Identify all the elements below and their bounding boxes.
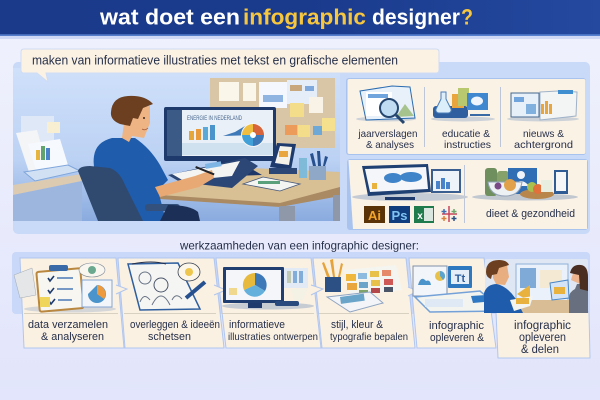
label: jaarverslagen: jaarverslagen xyxy=(358,128,418,140)
panel: use cases row one xyxy=(346,78,586,155)
step 5: infographic opleveren xyxy=(408,258,503,348)
step 2: overleggen xyxy=(116,258,224,348)
step 4: stijl en kleur xyxy=(311,258,415,348)
step 6: infographic opleveren en delen: infographic xyxy=(514,320,571,332)
illustration: designer at desk xyxy=(13,68,340,221)
heading: werkzaamheden: werkzaamheden van een infographic designer: xyxy=(179,238,419,252)
drawing tablet xyxy=(168,158,258,188)
icon: report with magnifier xyxy=(356,86,416,123)
icon: flask, books and screen xyxy=(431,88,495,122)
step 4: stijl en kleur: stijl, kleur & xyxy=(331,319,384,331)
step 3: illustraties ontwerpen: informatieve xyxy=(229,319,285,331)
title banner: wat doet een xyxy=(99,4,240,30)
panel: use cases row two xyxy=(347,159,588,230)
tablet, pens and print on desk xyxy=(243,143,328,191)
step 5: infographic opleveren: infographic xyxy=(429,320,484,332)
step 6: infographic opleveren en delen xyxy=(484,259,590,358)
upper blue backing panel xyxy=(13,62,590,234)
title banner: designer xyxy=(372,4,460,30)
icon: Photoshop xyxy=(389,206,410,223)
title banner xyxy=(0,0,600,39)
label: instructies: instructies xyxy=(444,139,491,151)
step 2: overleggen: overleggen & ideeën xyxy=(130,319,220,331)
label: educatie: educatie & xyxy=(442,128,490,140)
label: and analyses: & analyses xyxy=(366,139,414,151)
title banner: ? xyxy=(461,4,473,30)
label: dieet en gezondheid: dieet & gezondheid xyxy=(486,208,575,220)
step 3: illustraties ontwerpen: illustraties ontwerpen xyxy=(228,331,318,343)
step 6: infographic opleveren en delen: opleveren xyxy=(519,332,566,344)
monitor with chart xyxy=(164,107,276,177)
speech bubble: main description: maken van informatieve illustraties met tekst en grafische elementen xyxy=(32,54,398,68)
icon: Photoshop: Ps xyxy=(392,208,407,223)
step 1: data verzamelen: data verzamelen xyxy=(28,319,108,331)
icon: Excel: x xyxy=(417,211,423,222)
step 1: data verzamelen xyxy=(14,258,124,348)
step 2: overleggen: schetsen xyxy=(148,331,191,343)
icon: news on laptop and magazine xyxy=(507,90,579,122)
speech bubble: main description xyxy=(21,49,439,82)
office chair xyxy=(78,166,200,221)
label: achtergrond: achtergrond xyxy=(514,139,573,151)
designer figure xyxy=(94,96,215,221)
step 4: stijl en kleur: typografie bepalen xyxy=(330,331,408,343)
step 3: illustraties ontwerpen xyxy=(214,258,321,348)
icon: Tableau cross marks xyxy=(442,206,457,222)
icon: Illustrator xyxy=(364,206,385,223)
lower blue backing band xyxy=(12,252,590,314)
icon: Excel xyxy=(414,206,434,223)
icon: healthy food xyxy=(472,168,578,200)
cork board with notes xyxy=(210,78,335,148)
step 6: infographic opleveren en delen: & delen xyxy=(521,344,559,356)
icon: Illustrator: Ai xyxy=(368,208,381,223)
left desk with laptop and papers xyxy=(13,116,82,221)
step 5: infographic opleveren: Tt xyxy=(455,273,466,285)
label: nieuws: nieuws & xyxy=(523,128,564,140)
monitor with chart: ENERGIE IN NEDERLAND xyxy=(187,116,242,122)
title banner: infographic xyxy=(243,4,366,30)
desk xyxy=(153,168,340,207)
icon: monitors with world map xyxy=(352,164,468,201)
step 5: infographic opleveren: opleveren & xyxy=(430,332,485,344)
step 1: data verzamelen: & analyseren xyxy=(41,331,104,343)
